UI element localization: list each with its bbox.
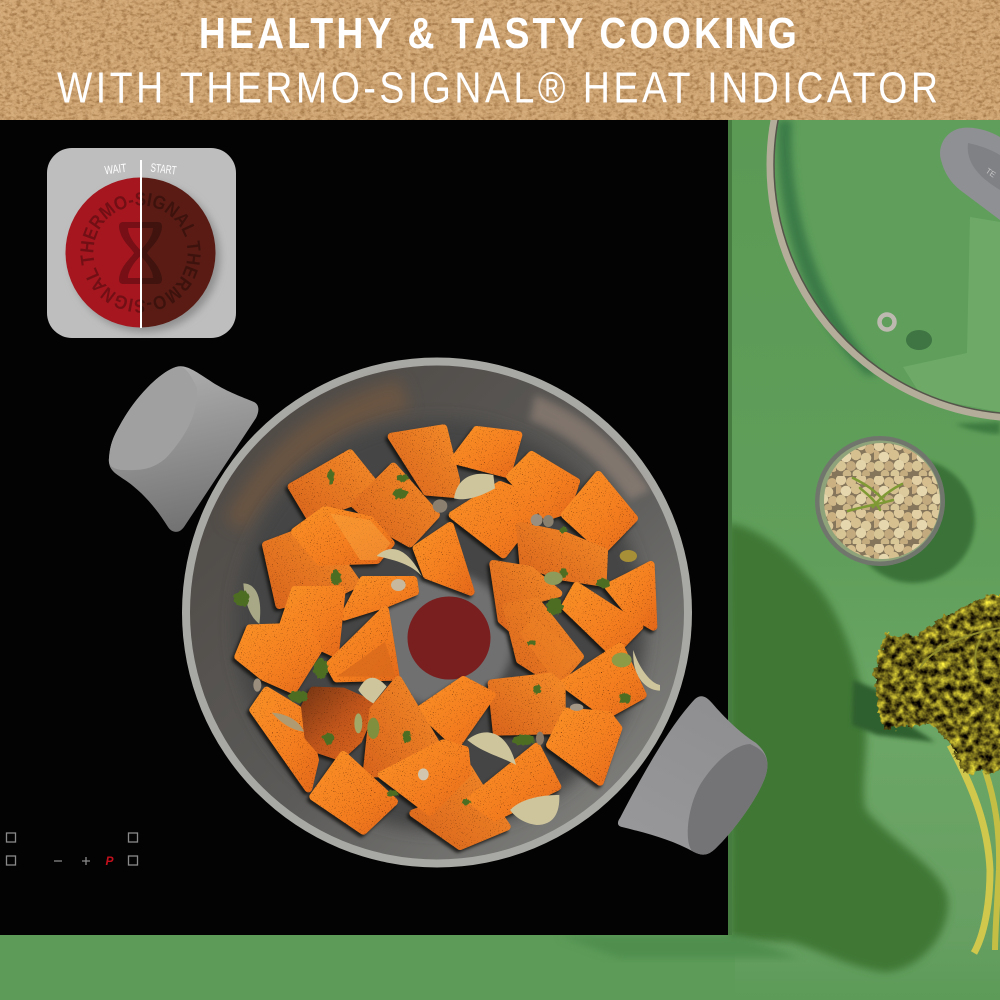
pan floor xyxy=(235,420,645,830)
start label: START xyxy=(150,160,178,178)
squash highlights xyxy=(330,513,580,683)
lid shadow on counter xyxy=(955,422,1000,434)
parsley leaves xyxy=(873,593,1000,773)
herbs xyxy=(234,469,631,805)
thermo-signal indicator icon xyxy=(47,148,236,338)
lid steel rim xyxy=(770,0,1000,418)
roasted squash pieces xyxy=(234,428,660,846)
split line xyxy=(140,160,142,328)
cooktop control panel: P xyxy=(106,854,114,868)
wait label: WAIT xyxy=(104,161,128,177)
pumpkin seeds xyxy=(253,499,637,780)
parsley stems xyxy=(950,745,999,953)
peppercorns xyxy=(824,443,940,559)
title line 1: HEALTHY & TASTY COOKING xyxy=(199,8,797,58)
right handle xyxy=(618,696,767,855)
parsley bunch xyxy=(852,593,1000,953)
garlic cloves xyxy=(243,474,660,825)
rosemary sprig xyxy=(848,478,902,511)
lid knob: TE xyxy=(984,166,997,180)
pan rim and wall xyxy=(182,358,692,868)
wall reflections xyxy=(225,380,410,530)
left handle xyxy=(109,366,258,532)
lid knob xyxy=(940,128,1000,220)
red thermo-signal spot xyxy=(408,596,490,680)
glass lid xyxy=(770,0,1000,434)
lid glass xyxy=(771,0,1000,417)
pepper bowl xyxy=(815,436,975,583)
heat disc xyxy=(66,178,224,336)
parsley shadow xyxy=(852,680,935,742)
lid vent ring xyxy=(880,314,932,350)
cooktop control panel xyxy=(6,833,138,868)
kraft paper header band xyxy=(0,0,1000,120)
black induction cooktop xyxy=(0,120,728,935)
icon tile xyxy=(47,148,236,338)
title line 2: WITH THERMO-SIGNAL® HEAT INDICATOR xyxy=(57,63,938,112)
heat disc: THERMO-SIGNAL THERMO-SIGNAL xyxy=(80,192,201,313)
frying pan xyxy=(109,358,767,868)
